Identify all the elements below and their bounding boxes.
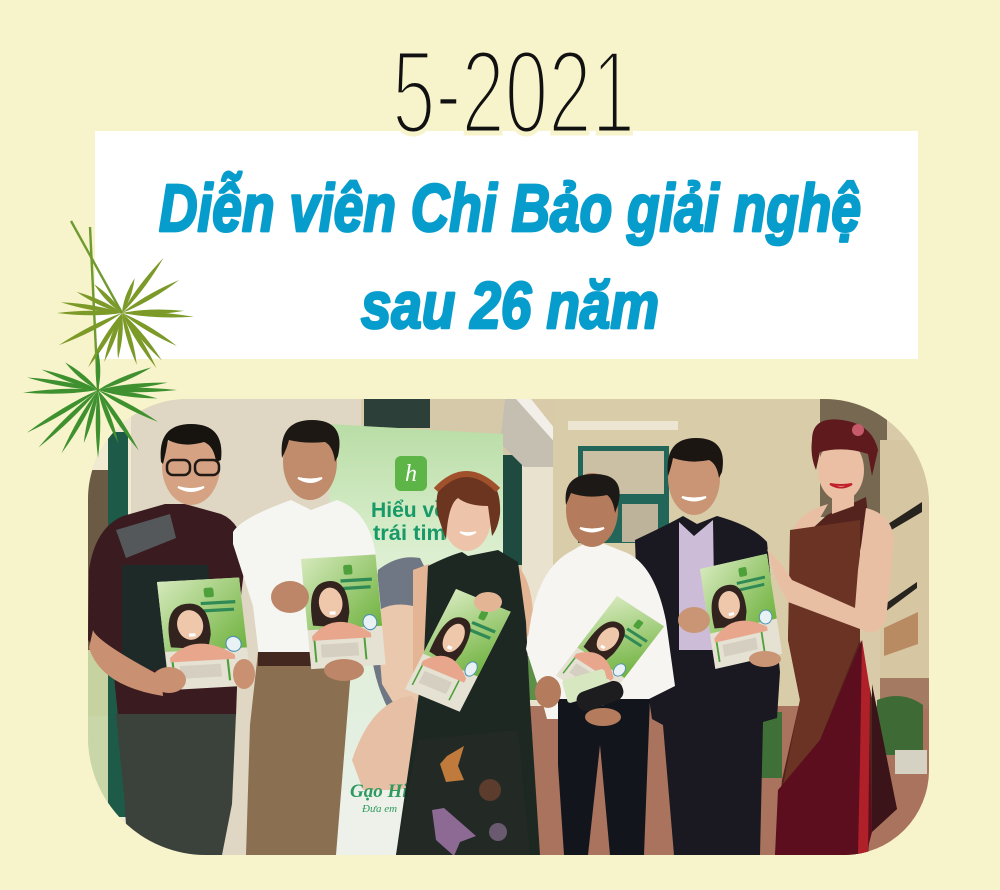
person 5 <box>635 438 782 855</box>
person 1 <box>88 424 255 855</box>
title date: 5-2021 <box>392 26 635 159</box>
building background <box>88 399 930 855</box>
green banner <box>328 424 503 855</box>
green banner: trái tim <box>373 522 446 545</box>
person 2 <box>233 420 386 855</box>
lower palm <box>23 350 177 458</box>
person 4 <box>526 473 675 855</box>
upper palm <box>57 257 194 369</box>
banner logo <box>395 456 427 491</box>
person 3 <box>396 474 540 856</box>
decorative palm leaves <box>23 221 194 458</box>
banner child <box>373 557 424 706</box>
banner text: Hiểu về <box>371 499 446 522</box>
photo: group of six people holding product boxes <box>88 399 930 856</box>
green banner: Đưa em <box>361 803 397 815</box>
palm stems <box>71 221 122 392</box>
person 6 <box>767 419 897 855</box>
green banner: Gạo Hiểu <box>350 781 427 802</box>
heading line 2: sau 26 năm <box>361 268 659 342</box>
green banner: h <box>405 461 417 487</box>
heading panel <box>95 131 918 359</box>
